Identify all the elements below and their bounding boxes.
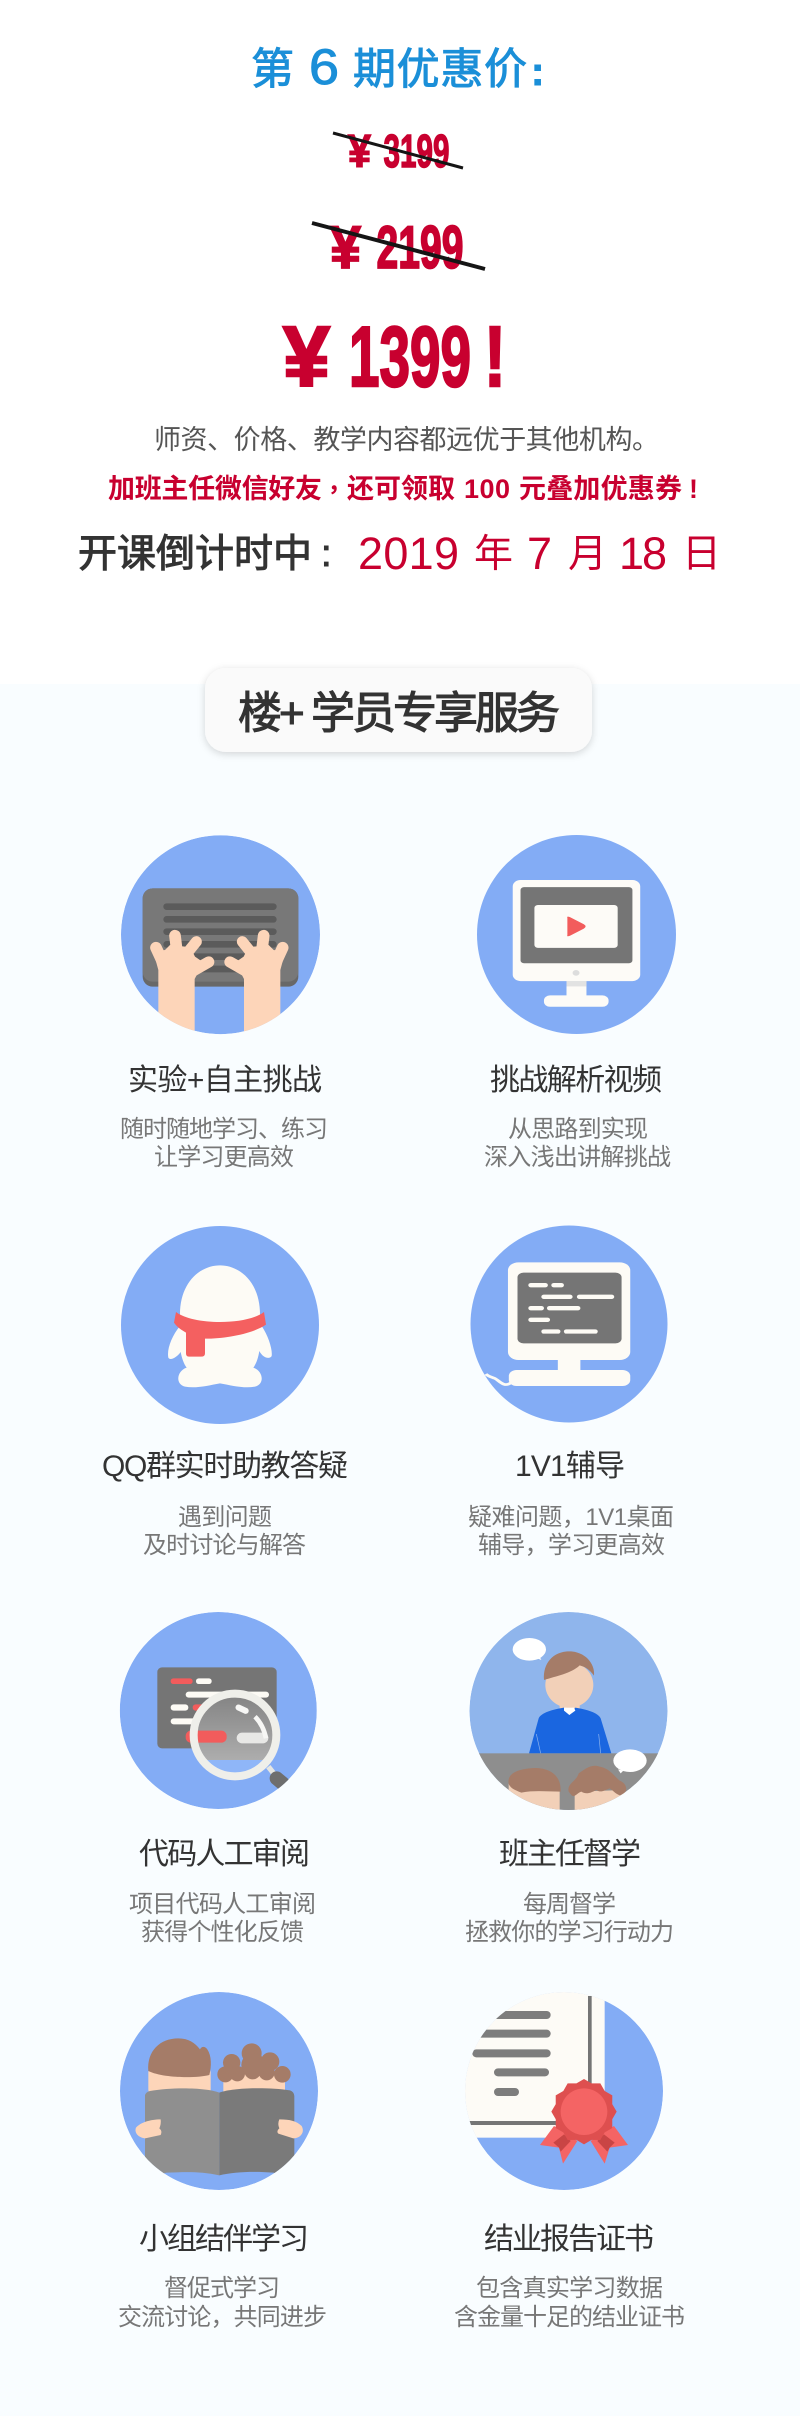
current price 1399: ! [484, 310, 506, 405]
current price 1399: ¥ [283, 310, 330, 405]
description [468, 1497, 674, 1560]
description: 疑难问题，1V1桌面 [468, 1497, 674, 1532]
description: 让学习更高效 [154, 1144, 294, 1171]
title: 小组结伴学习 [139, 2223, 309, 2256]
heading pill: student services: 楼+ 学员专享服务 [238, 689, 560, 738]
text: countdown: 年 [474, 533, 513, 576]
current price 1399: 1399 [349, 310, 471, 405]
description: 随时随地学习、练习 [120, 1116, 328, 1143]
title: 代码人工审阅 [139, 1838, 310, 1871]
icon: keyboard and hands [121, 835, 320, 1035]
icon: teacher and students [468, 1612, 668, 1810]
description: 项目代码人工审阅 [129, 1891, 316, 1918]
service: group study [118, 1992, 327, 2332]
text: countdown: 月 [568, 533, 607, 576]
description [118, 2275, 327, 2332]
icon: terminal computer [470, 1226, 668, 1422]
text: countdown: 开课倒计时中 [78, 533, 312, 576]
description: 交流讨论，共同进步 [118, 2297, 327, 2332]
title: QQ群实时助教答疑 [102, 1450, 348, 1483]
service: 1V1 tutoring [468, 1226, 674, 1560]
text: coupon note: ， [322, 470, 346, 505]
text: coupon note [108, 470, 698, 505]
description: 含金量十足的结业证书 [454, 2304, 685, 2331]
old price 3199 with strike: ¥ [348, 125, 371, 177]
text: coupon note: 100 [464, 474, 510, 504]
old price 2199 with strike [312, 214, 485, 281]
title: discount heading [251, 39, 544, 95]
service: QQ group [102, 1226, 348, 1559]
text: coupon note: 还可领取 [347, 474, 455, 504]
service: certificate [454, 1988, 685, 2331]
service: code review [120, 1612, 317, 1946]
icon: certificate with seal [461, 1988, 663, 2190]
title: discount heading: 第 [251, 46, 294, 94]
title: 挑战解析视频 [490, 1064, 662, 1097]
description: 拯救你的学习行动力 [465, 1919, 674, 1946]
current price 1399 [283, 310, 506, 405]
title: 结业报告证书 [484, 2223, 654, 2256]
icon: two people reading a book [120, 1992, 318, 2190]
title: discount heading: 期优惠价 [353, 46, 527, 94]
icon: monitor with play button [477, 835, 676, 1034]
icon: QQ penguin [121, 1226, 319, 1424]
description: 包含真实学习数据 [476, 2275, 663, 2302]
heading pill: student services [205, 668, 592, 752]
title: 1V1辅导 [515, 1450, 625, 1483]
description: 遇到问题 [178, 1504, 272, 1531]
panel: pricing [78, 39, 721, 579]
text: coupon note: 加班主任微信好友 [108, 474, 322, 504]
description [454, 2275, 685, 2331]
text: coupon note: 元叠加优惠券 [519, 474, 682, 504]
text: countdown: 18 [619, 528, 667, 579]
description [465, 1891, 674, 1946]
icon: code card with magnifier [120, 1612, 317, 1809]
description: 从思路到实现 [508, 1116, 648, 1143]
old price 2199 with strike: 2199 [376, 214, 464, 281]
description: 辅导，学习更高效 [478, 1525, 665, 1560]
service: experiments [120, 835, 328, 1171]
old price 3199 with strike: 3199 [384, 125, 450, 177]
description [484, 1116, 671, 1171]
description: 每周督学 [523, 1891, 616, 1918]
old price 2199 with strike: ¥ [330, 214, 362, 281]
description: 及时讨论与解答 [143, 1532, 306, 1559]
description: 深入浅出讲解挑战 [484, 1144, 671, 1171]
text: countdown: 7 [527, 528, 552, 579]
description: 获得个性化反馈 [141, 1919, 304, 1946]
description [120, 1116, 328, 1171]
title: discount heading: 6 [309, 39, 339, 95]
text: countdown: : [321, 533, 332, 575]
text: countdown [78, 528, 721, 579]
text: countdown: 2019 [358, 528, 459, 579]
service: head teacher [465, 1612, 674, 1946]
old price 3199 with strike [333, 125, 463, 177]
title: 班主任督学 [499, 1838, 641, 1871]
title: discount heading: : [531, 50, 544, 94]
description [129, 1891, 316, 1946]
description: 督促式学习 [164, 2275, 280, 2302]
text: countdown: 日 [682, 533, 721, 576]
text: advantages: 师资、价格、教学内容都远优于其他机构。 [154, 425, 659, 455]
description [143, 1504, 306, 1559]
title: 实验+自主挑战 [128, 1064, 322, 1097]
service: explanation video [477, 835, 676, 1171]
text: coupon note: ! [689, 474, 698, 504]
